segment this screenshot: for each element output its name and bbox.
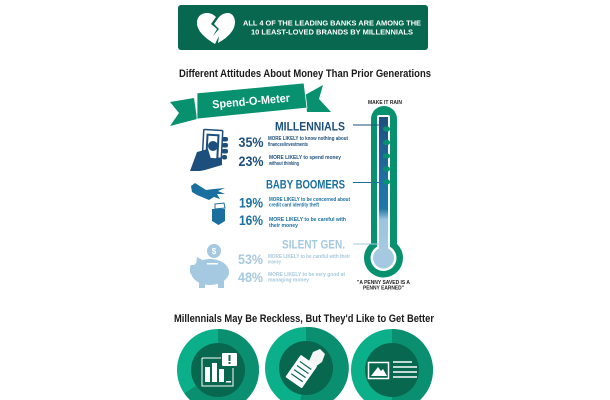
section: silent generation: money (268, 260, 282, 266)
section: millennials: MORE LIKELY to know nothing about (268, 136, 348, 142)
stat 53%: 53% (238, 251, 263, 267)
stat 48%: 48% (238, 269, 263, 285)
banner text: ALL 4 OF THE LEADING BANKS ARE AMONG THE (243, 18, 421, 28)
icon: hand holding money (190, 129, 228, 171)
section: baby boomers (239, 180, 350, 229)
banner: least-loved brands (178, 5, 428, 50)
section: millennials: MORE LIKELY to spend money (269, 155, 342, 161)
section: millennials (238, 122, 348, 169)
section: silent generation: MORE LIKELY to be very good at (268, 272, 345, 278)
section: baby boomers: credit card identity theft (269, 202, 319, 208)
icon: piggy bank with coin (190, 244, 229, 288)
stat 35%: 35% (238, 134, 264, 150)
section: baby boomers: MORE LIKELY to be concerned about (269, 197, 350, 203)
heading: attitudes: Different Attitudes About Money Than Prior Generations (179, 68, 431, 80)
section: millennials: without thinking (268, 161, 299, 167)
stat 16%: 16% (239, 212, 263, 228)
icon: hand dropping card into pocket (191, 183, 225, 225)
circle icon: article with image (351, 329, 433, 400)
label: make it rain: MAKE IT RAIN (368, 100, 402, 106)
banner text line 2: 10 LEAST-LOVED BRANDS BY MILLENNIALS (251, 28, 413, 36)
heading: get better: Millennials May Be Reckless, But They'd Like to Get Better (174, 313, 435, 325)
icon: broken heart (197, 13, 235, 44)
section: millennials: finances/investments (268, 142, 308, 148)
ribbon: Spend-O-Meter: Spend-O-Meter (212, 93, 291, 111)
section: baby boomers: their money (269, 223, 299, 229)
thermometer (353, 106, 403, 278)
label: a penny saved (357, 280, 410, 292)
section: baby boomers: MORE LIKELY to be careful with (269, 217, 347, 223)
section: millennials: MILLENNIALS (275, 122, 345, 134)
icon: piggy bank with coin: $ (212, 247, 217, 256)
stat 23%: 23% (238, 153, 264, 169)
circle icon: notepad and pen (265, 327, 349, 400)
section: silent generation: managing money (268, 278, 310, 284)
thermometer ticks (383, 126, 390, 184)
circle icon: chart alert (177, 329, 259, 400)
section: silent generation: MORE LIKELY to be careful with their (268, 254, 351, 260)
stat 19%: 19% (239, 194, 263, 210)
label: a penny saved: PENNY EARNED" (363, 286, 404, 292)
section: silent generation (238, 240, 351, 285)
section: silent generation: SILENT GEN. (282, 240, 345, 252)
label: a penny saved: "A PENNY SAVED IS A (357, 280, 410, 286)
section: baby boomers: BABY BOOMERS (266, 180, 345, 192)
ribbon: Spend-O-Meter (170, 83, 331, 126)
